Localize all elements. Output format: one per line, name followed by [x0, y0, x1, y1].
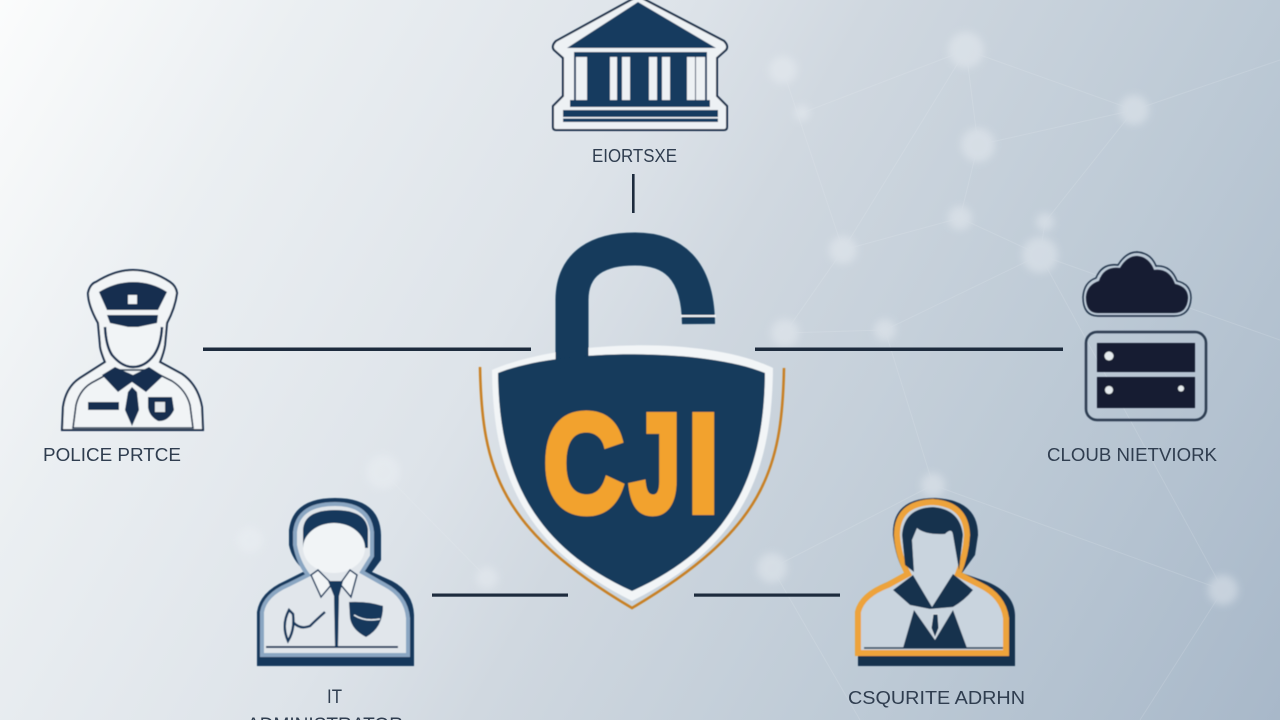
icon: suit jacket — [903, 610, 967, 648]
icon: cap — [99, 282, 167, 310]
icon: badge centre — [155, 402, 165, 412]
node: cloud network — [1083, 252, 1206, 420]
icon: cap badge — [128, 295, 137, 304]
icon: navy shield — [498, 354, 765, 591]
icon: white shield border — [492, 345, 773, 601]
icon: stethoscope — [285, 610, 325, 641]
icon: pocket highlight — [354, 615, 380, 620]
label: security admin: CSQURITE ADRHN — [848, 688, 1025, 708]
shield title: J — [629, 384, 681, 542]
label: cloud network: CLOUB NIETVIORK — [1047, 445, 1217, 465]
central shield and padlock — [480, 249, 784, 608]
icon: entablature — [574, 52, 707, 57]
icon: server rack bottom — [1097, 377, 1195, 408]
icon: roof — [567, 2, 716, 48]
icon: police badge — [148, 397, 174, 421]
icon: police outer outline — [62, 270, 203, 430]
icon: admin orange outline — [858, 502, 1006, 653]
icon: shackle highlight — [681, 315, 716, 317]
label: IT: IT — [327, 687, 342, 708]
icon: orange shield rim — [480, 367, 784, 608]
icon: cap brim — [107, 315, 158, 328]
shield title: I — [687, 384, 720, 542]
icon: IT person blue outline — [262, 504, 408, 655]
icon: face — [105, 327, 162, 367]
icon: cloud — [1086, 256, 1188, 313]
icon: base steps — [563, 100, 718, 122]
icon: server lights — [1104, 352, 1184, 394]
icon: collar and shoulders — [893, 574, 973, 609]
icon: IT inner outline — [266, 646, 398, 648]
icon: tie — [328, 581, 343, 647]
icon: admin shadow body — [858, 498, 1015, 666]
icon: columns — [574, 57, 707, 101]
icon: police inner outline — [73, 370, 193, 428]
icon: tie — [931, 614, 939, 638]
icon: face — [303, 523, 365, 573]
node: police — [62, 270, 203, 430]
icon: cloud outline — [1083, 252, 1191, 316]
shield title: C — [543, 384, 624, 542]
icon: open padlock shackle — [572, 249, 698, 365]
icon: inner base line — [864, 647, 1003, 649]
icon: collar — [102, 367, 163, 392]
node: security admin — [858, 498, 1015, 666]
icon: pocket shield — [349, 602, 383, 637]
label: police: POLICE PRTCE — [43, 445, 181, 465]
connector lines — [203, 174, 1063, 597]
icon: server frame — [1086, 332, 1206, 420]
icon: collar — [311, 570, 357, 597]
icon: IT person shadow body — [257, 498, 414, 666]
node: enterprise building — [553, 0, 727, 130]
icon: hair and neck — [902, 507, 963, 572]
icon: building outline — [553, 0, 727, 130]
icon: tie — [125, 387, 139, 426]
background network pattern — [237, 32, 1280, 720]
icon: hair — [303, 510, 368, 548]
label: enterprise: EIORTSXE — [592, 146, 677, 166]
shield title — [543, 384, 720, 542]
node: IT administrator — [257, 498, 414, 666]
icon: server rack top — [1097, 343, 1195, 372]
icon: name bar — [88, 402, 119, 410]
